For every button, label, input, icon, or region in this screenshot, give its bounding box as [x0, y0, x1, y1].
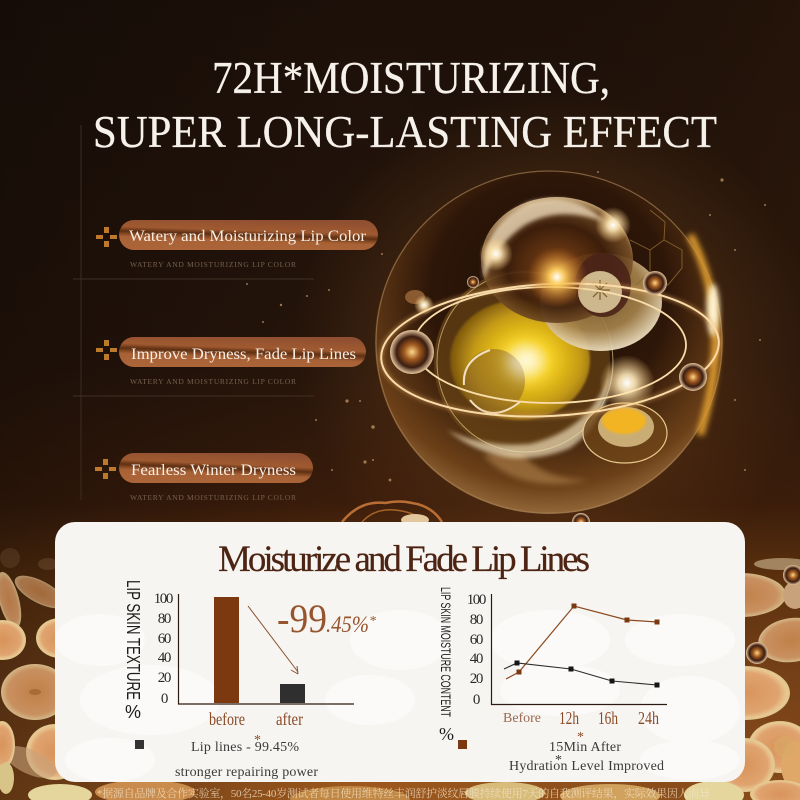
line chart: lip skin moisture content: 24h [638, 708, 659, 728]
bar chart: lip skin texture: 100 [154, 591, 173, 607]
white chart panel [55, 522, 745, 782]
line chart: lip skin moisture content: 15Min After [549, 740, 621, 755]
benefit 3: Fearless Winter Dryness [131, 462, 296, 479]
benefit 1: WATERY AND MOISTURIZING LIP COLOR [130, 260, 296, 269]
line chart: lip skin moisture content: * [555, 753, 562, 768]
series: before [504, 660, 660, 688]
benefit 2 [96, 337, 366, 386]
bar chart: lip skin texture: Lip lines - 99.45% [191, 740, 299, 755]
golden swirl and cells [0, 502, 800, 800]
benefit list [73, 125, 378, 502]
title [93, 53, 717, 157]
bar chart: lip skin texture: after [276, 709, 303, 729]
line chart: lip skin moisture content: 12h [559, 708, 579, 728]
benefit 3 [95, 453, 313, 502]
line chart: lip skin moisture content: * [577, 730, 584, 745]
title: SUPER LONG-LASTING EFFECT [93, 107, 717, 157]
starbursts [414, 207, 655, 411]
footnote: *据源自品牌及合作实验室，50名25-40岁测试者每日使用维特丝丰润舒护淡纹唇膜持续使用7天的自我测评结果，实际效果因人而异 [97, 786, 710, 800]
callout: -99.45%: * [369, 614, 376, 629]
bar chart: lip skin texture: 80 [158, 611, 171, 627]
yellow core bubble [434, 270, 613, 454]
bar chart: lip skin texture [123, 580, 376, 780]
line chart: lip skin moisture content: 80 [470, 612, 483, 628]
benefit 3: WATERY AND MOISTURIZING LIP COLOR [130, 493, 296, 502]
line chart: lip skin moisture content: LIP SKIN MOISTURE CONTENT [438, 587, 454, 717]
orbiting beads [390, 271, 707, 391]
line chart: lip skin moisture content: 16h [598, 708, 618, 728]
orbit rings [378, 275, 722, 425]
upper bubbles [481, 197, 662, 351]
benefit 2: WATERY AND MOISTURIZING LIP COLOR [130, 377, 296, 386]
hexagon lattice [630, 210, 682, 285]
lower right capsule [583, 403, 667, 463]
bar chart: lip skin texture: * [254, 733, 261, 748]
callout: -99.45% [277, 596, 376, 641]
benefit 1: Watery and Moisturizing Lip Color [129, 228, 367, 245]
bar chart: lip skin texture: % [125, 702, 141, 722]
bar chart: lip skin texture: LIP SKIN TEXTURE [123, 580, 143, 700]
benefit 1 [96, 220, 378, 269]
bar chart: lip skin texture: 40 [158, 650, 171, 666]
line chart: lip skin moisture content: 100 [467, 592, 486, 608]
bar chart: lip skin texture: 0 [161, 691, 168, 707]
line chart: lip skin moisture content: 60 [470, 632, 483, 648]
line chart: lip skin moisture content: 20 [470, 671, 483, 687]
floating dust particles [246, 171, 766, 481]
line chart: lip skin moisture content: Hydration Level Improved [509, 759, 664, 774]
callout: -99.45%: .45% [326, 612, 369, 637]
title: 72H*MOISTURIZING, [212, 53, 610, 103]
benefit 2: Improve Dryness, Fade Lip Lines [131, 346, 356, 363]
golden molecule sphere [375, 170, 723, 514]
line chart: lip skin moisture content: % [439, 724, 454, 744]
callout: -99.45%: -99 [277, 596, 327, 641]
line chart: lip skin moisture content: Before [503, 711, 541, 726]
line chart: lip skin moisture content: 0 [473, 692, 480, 708]
panel heading: Moisturize and Fade Lip Lines [218, 539, 590, 580]
bar chart: lip skin texture: before [209, 709, 245, 729]
bar chart: lip skin texture: 60 [158, 631, 171, 647]
bar chart: lip skin texture: stronger repairing power [175, 765, 318, 780]
line chart: lip skin moisture content: 40 [470, 651, 483, 667]
series: after [506, 604, 660, 679]
bright crescent [447, 365, 612, 458]
arrow: decrease [248, 606, 298, 674]
line chart: lip skin moisture content [438, 587, 667, 774]
bar chart: lip skin texture: 20 [158, 670, 171, 686]
